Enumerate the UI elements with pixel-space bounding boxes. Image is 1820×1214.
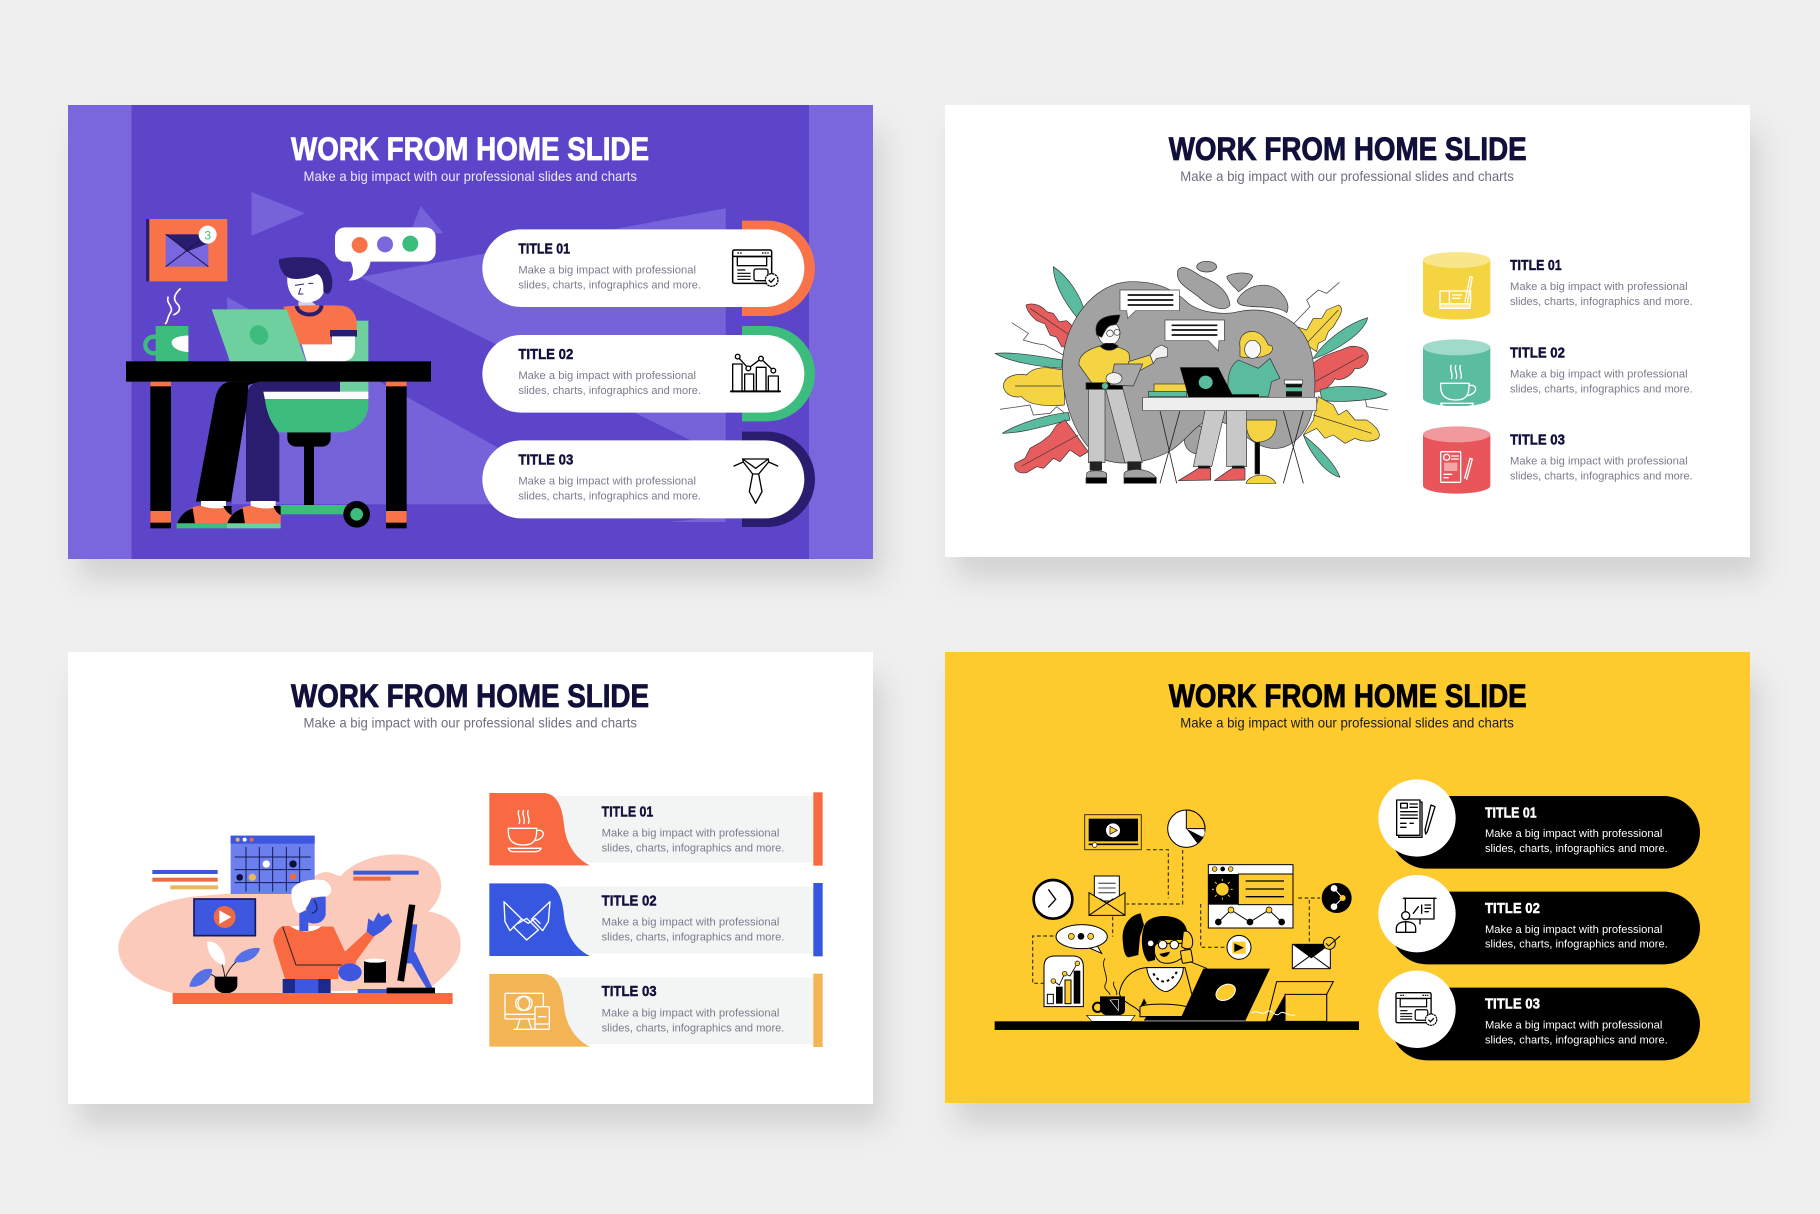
item 1: slides, charts, infographics and more. [518, 279, 701, 291]
envelope with check [1292, 936, 1340, 969]
icon: monitor and phone [505, 993, 549, 1029]
panel shadows [78, 130, 1760, 1126]
panel: white slide with banners [68, 652, 873, 1104]
monitor [358, 904, 435, 993]
shoes [177, 501, 281, 528]
item 1 [1423, 252, 1693, 320]
laptop [212, 309, 306, 361]
item 1: Make a big impact with professional [518, 264, 696, 276]
heading: WORK FROM HOME SLIDE [1169, 131, 1527, 167]
icon: handshake [504, 902, 550, 940]
video player [1085, 815, 1141, 850]
item 2: TITLE 02 [1485, 901, 1540, 917]
illustration: woman on phone with laptop [995, 810, 1359, 1030]
item 2 [482, 326, 815, 421]
item 2: Make a big impact with professional [1485, 924, 1662, 936]
subheading: Make a big impact with our professional slides and charts [304, 714, 637, 730]
item 3 [1423, 426, 1693, 494]
clock [1034, 880, 1072, 919]
item 1: TITLE 01 [1510, 258, 1562, 274]
item 2 [1423, 339, 1693, 407]
icon: necktie [734, 459, 778, 503]
share icon [1322, 883, 1352, 913]
item 1: Make a big impact with professional [1510, 281, 1688, 293]
item 1 [1378, 779, 1700, 869]
man standing [1079, 315, 1168, 483]
desk [995, 1021, 1359, 1030]
legs [196, 382, 340, 502]
desk [126, 361, 431, 528]
chair seat and base [263, 392, 370, 528]
panel: purple slide [68, 105, 873, 559]
heading: WORK FROM HOME SLIDE [291, 678, 649, 714]
man upper body [279, 257, 357, 361]
item 3: slides, charts, infographics and more. [602, 1022, 784, 1034]
chat bubbles [1120, 290, 1224, 351]
play button [1227, 935, 1251, 959]
item 2: TITLE 02 [602, 894, 657, 910]
item 3: TITLE 03 [1485, 997, 1540, 1013]
icon: mail poster [146, 219, 227, 281]
text lines [152, 870, 419, 889]
item 3: Make a big impact with professional [1510, 455, 1688, 467]
item 3 [482, 432, 815, 527]
web window [1208, 865, 1293, 928]
person [273, 880, 392, 993]
item 2: slides, charts, infographics and more. [1510, 383, 1693, 395]
subheading: Make a big impact with our professional slides and charts [304, 168, 637, 184]
item 3: Make a big impact with professional [518, 475, 696, 487]
woman's legs and stool [1178, 411, 1277, 483]
coffee mug [145, 288, 188, 361]
desk [173, 993, 453, 1004]
calendar [231, 836, 315, 894]
dashed connectors [1033, 850, 1320, 983]
list: three cylinders [1423, 252, 1693, 494]
item 1: TITLE 01 [602, 804, 653, 820]
icon: bar chart [731, 354, 780, 391]
panel: yellow slide [945, 652, 1750, 1103]
item 3: slides, charts, infographics and more. [1485, 1034, 1668, 1046]
item 2 [1378, 875, 1700, 964]
item 2: TITLE 02 [1510, 345, 1565, 361]
item 2: Make a big impact with professional [602, 917, 779, 929]
item 1: slides, charts, infographics and more. [1510, 296, 1693, 308]
item 3: TITLE 03 [518, 452, 573, 468]
illustration: two colleagues with leaves [995, 261, 1388, 483]
chat bubble [1056, 925, 1107, 953]
item 1 [489, 792, 823, 866]
squiggle lines [1000, 282, 1388, 415]
item 3: Make a big impact with professional [1485, 1019, 1662, 1031]
heading: WORK FROM HOME SLIDE [291, 131, 649, 167]
list: three banners [489, 792, 823, 1047]
woman [1104, 913, 1207, 1017]
chair back [340, 321, 368, 392]
item 1: TITLE 01 [518, 241, 570, 257]
tablet box [1252, 982, 1333, 1021]
heading: WORK FROM HOME SLIDE [1169, 678, 1527, 714]
icon: document and pen [1397, 800, 1435, 837]
item 3 [1378, 971, 1700, 1060]
list: three black pills [1378, 779, 1700, 1060]
illustration: person at computer [118, 836, 461, 1004]
laptop [1143, 969, 1270, 1021]
item 2: slides, charts, infographics and more. [518, 385, 701, 397]
item 3: slides, charts, infographics and more. [1510, 470, 1693, 482]
plant [189, 942, 260, 993]
item 3 [489, 974, 823, 1047]
item 1: Make a big impact with professional [602, 827, 779, 839]
panel: white slide with cylinders [945, 105, 1750, 557]
item 1: TITLE 01 [1485, 805, 1537, 821]
pie chart [1168, 810, 1205, 847]
grey blobs [1062, 261, 1315, 463]
list: three pills [482, 221, 815, 527]
pink blob [118, 854, 461, 995]
chart card [1044, 956, 1083, 1007]
envelope with letter [1089, 876, 1125, 915]
coffee cup and saucer [1087, 996, 1135, 1021]
item 2: Make a big impact with professional [518, 370, 696, 382]
item 1: slides, charts, infographics and more. [1485, 843, 1668, 855]
item 1: slides, charts, infographics and more. [602, 842, 784, 854]
icon: presenter [1396, 898, 1436, 932]
item 2: slides, charts, infographics and more. [1485, 939, 1668, 951]
item 3: Make a big impact with professional [602, 1007, 779, 1019]
item 1 [482, 221, 815, 316]
item 3: TITLE 03 [1510, 432, 1565, 448]
item 1: Make a big impact with professional [1485, 828, 1662, 840]
background light triangles [227, 192, 726, 522]
subheading: Make a big impact with our professional slides and charts [1180, 714, 1514, 730]
video screen [194, 899, 255, 936]
item 2 [489, 883, 823, 956]
item 3: TITLE 03 [602, 984, 657, 1000]
desk [1143, 397, 1317, 483]
illustration: man at desk [126, 219, 436, 528]
woman upper body [1228, 331, 1280, 397]
item 2: Make a big impact with professional [1510, 368, 1688, 380]
item 3: slides, charts, infographics and more. [518, 490, 701, 502]
item 2: slides, charts, infographics and more. [602, 932, 784, 944]
item 2: TITLE 02 [518, 347, 573, 363]
speech bubble [335, 227, 436, 280]
subheading: Make a big impact with our professional slides and charts [1180, 168, 1514, 184]
leaves [995, 267, 1387, 477]
icon: mail poster: 3 [204, 228, 211, 242]
laptop and books [1148, 367, 1303, 397]
